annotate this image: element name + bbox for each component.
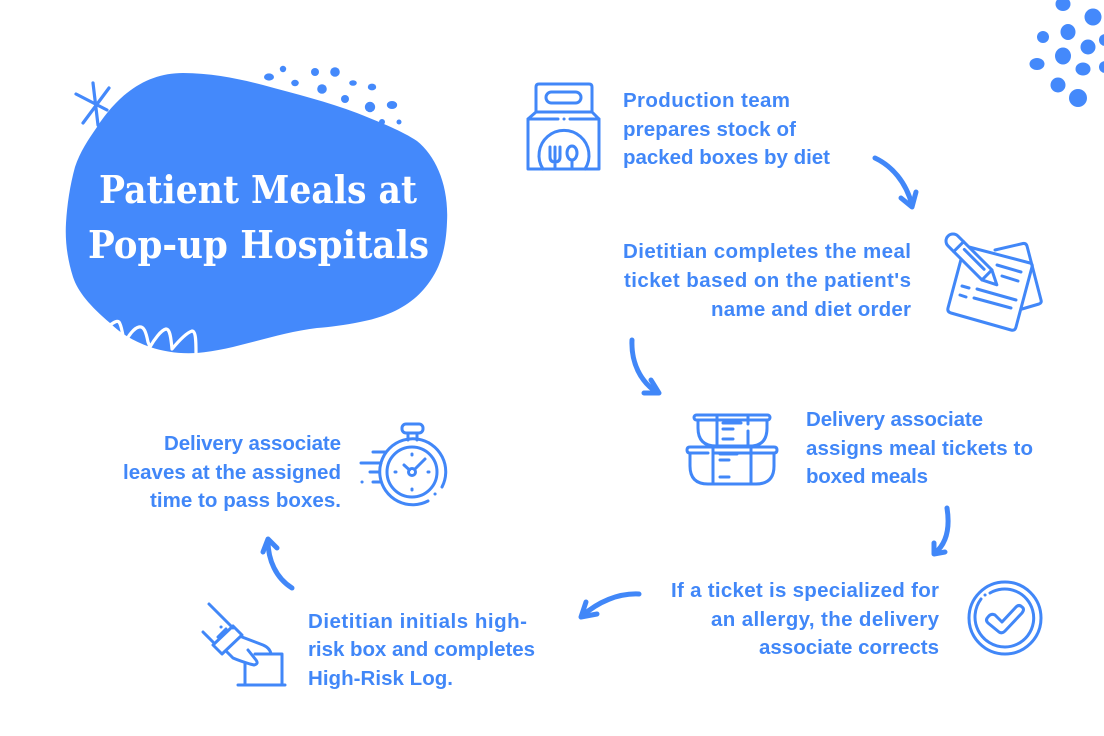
title blob: [66, 73, 447, 353]
decoration: asterisk star: [76, 83, 109, 125]
decoration: dots above blob: [264, 66, 402, 125]
title: Patient Meals at: [99, 167, 417, 212]
step 5 text: High-Risk Log.: [308, 667, 453, 690]
step 1 text: Production team: [623, 89, 790, 112]
arrow 5: [263, 539, 292, 588]
arrow 4: [581, 594, 639, 617]
icon: notes and pencil: [943, 231, 1041, 330]
icon: check badge: [969, 582, 1041, 654]
arrow 3: [934, 508, 948, 554]
title: Pop-up Hospitals: [88, 222, 429, 267]
step 3 text: assigns meal tickets to: [806, 437, 1033, 460]
title: [88, 167, 429, 267]
step 4 text: If a ticket is specialized for: [671, 579, 939, 602]
step 4 text: an allergy, the delivery: [711, 608, 940, 631]
icon: stopwatch: [361, 424, 446, 505]
step 3 text: Delivery associate: [806, 408, 983, 431]
arrow 1: [875, 158, 916, 207]
step 3 text: [806, 408, 1033, 488]
step 6 text: leaves at the assigned: [123, 461, 341, 484]
step 6 text: time to pass boxes.: [150, 489, 341, 512]
arrow 2: [632, 340, 659, 393]
step 2 text: ticket based on the patient's: [624, 269, 911, 292]
step 5 text: Dietitian initials high-: [308, 610, 527, 633]
step 1 text: [623, 89, 830, 169]
step 4 text: [671, 579, 940, 659]
step 1 text: prepares stock of: [623, 118, 796, 141]
icon: stacked food containers: [687, 415, 777, 484]
step 3 text: boxed meals: [806, 465, 928, 488]
icon: hand placing box: [203, 604, 285, 685]
step 6 text: Delivery associate: [164, 432, 341, 455]
step 2 text: [623, 240, 911, 321]
step 1 text: packed boxes by diet: [623, 146, 830, 169]
step 5 text: [308, 610, 535, 690]
decoration: dots top right: [1030, 0, 1104, 107]
step 5 text: risk box and completes: [308, 638, 535, 661]
icon: packed meal box: [528, 84, 599, 169]
white zigzag doodle: [110, 321, 196, 353]
step 2 text: name and diet order: [711, 298, 911, 321]
step 6 text: [123, 432, 341, 512]
step 4 text: associate corrects: [759, 636, 939, 659]
step 2 text: Dietitian completes the meal: [623, 240, 911, 263]
